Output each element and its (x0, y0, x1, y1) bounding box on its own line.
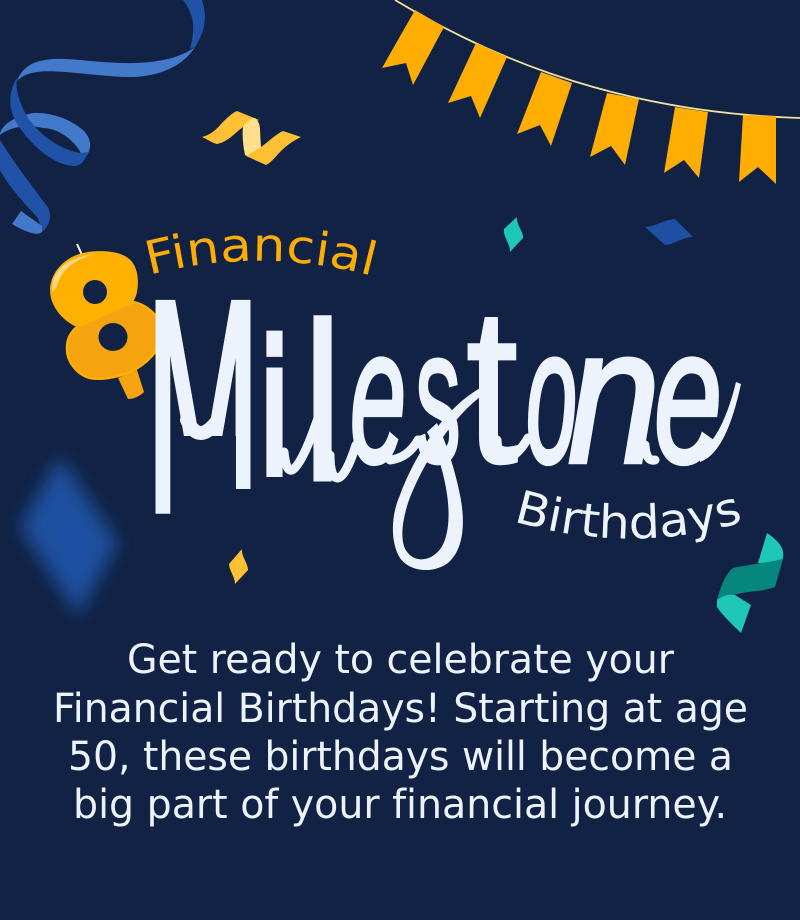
decorative end flourish (698, 382, 741, 462)
heading word: Milestone (146, 239, 741, 575)
upper hole (83, 280, 107, 304)
candle wick (77, 244, 83, 257)
heading word: Milestone: o (526, 288, 577, 503)
heading word: Milestone: e (350, 288, 406, 503)
small yellow confetti (229, 549, 248, 584)
body paragraph: Financial Birthdays! Starting at age (53, 686, 748, 732)
heading word: Milestone: i (262, 302, 287, 512)
script connector strokes (284, 418, 655, 478)
heading word: Milestone: l (306, 281, 339, 525)
body paragraph (53, 637, 748, 828)
blurred blue diamond (20, 456, 118, 616)
highlight (53, 254, 95, 292)
heading word: Milestone: e (654, 288, 722, 503)
blue confetti (645, 219, 693, 245)
heading word: Birthdays: Birthdays (518, 490, 740, 543)
heading word: Milestone: s (415, 288, 461, 503)
heading word: Milestone: t (466, 261, 518, 509)
body paragraph: 50, these birthdays will become a (68, 734, 733, 780)
lower lobe of 8 (67, 302, 162, 379)
heading word: Milestone: n (568, 288, 660, 503)
bunting string (395, 0, 800, 118)
blue curled ribbon (0, 0, 205, 234)
teal confetti (504, 217, 523, 252)
upper lobe of 8 (50, 251, 138, 327)
number 8 candle (50, 244, 162, 399)
decorative descender loop (393, 387, 484, 570)
background patch trimming the M to its raised V (172, 436, 258, 515)
bunting flags (382, 10, 776, 184)
yellow ribbon confetti (202, 111, 301, 165)
body paragraph: big part of your financial journey. (73, 782, 727, 828)
teal ribbon (717, 533, 783, 633)
M lower V join (187, 420, 218, 433)
candle stem (118, 370, 144, 399)
body paragraph: Get ready to celebrate your (127, 637, 675, 683)
heading word: Financial: Financial (146, 230, 376, 275)
heading word: Financial (146, 230, 376, 275)
lower hole (98, 323, 128, 351)
heading word: Milestone: M (146, 239, 260, 575)
